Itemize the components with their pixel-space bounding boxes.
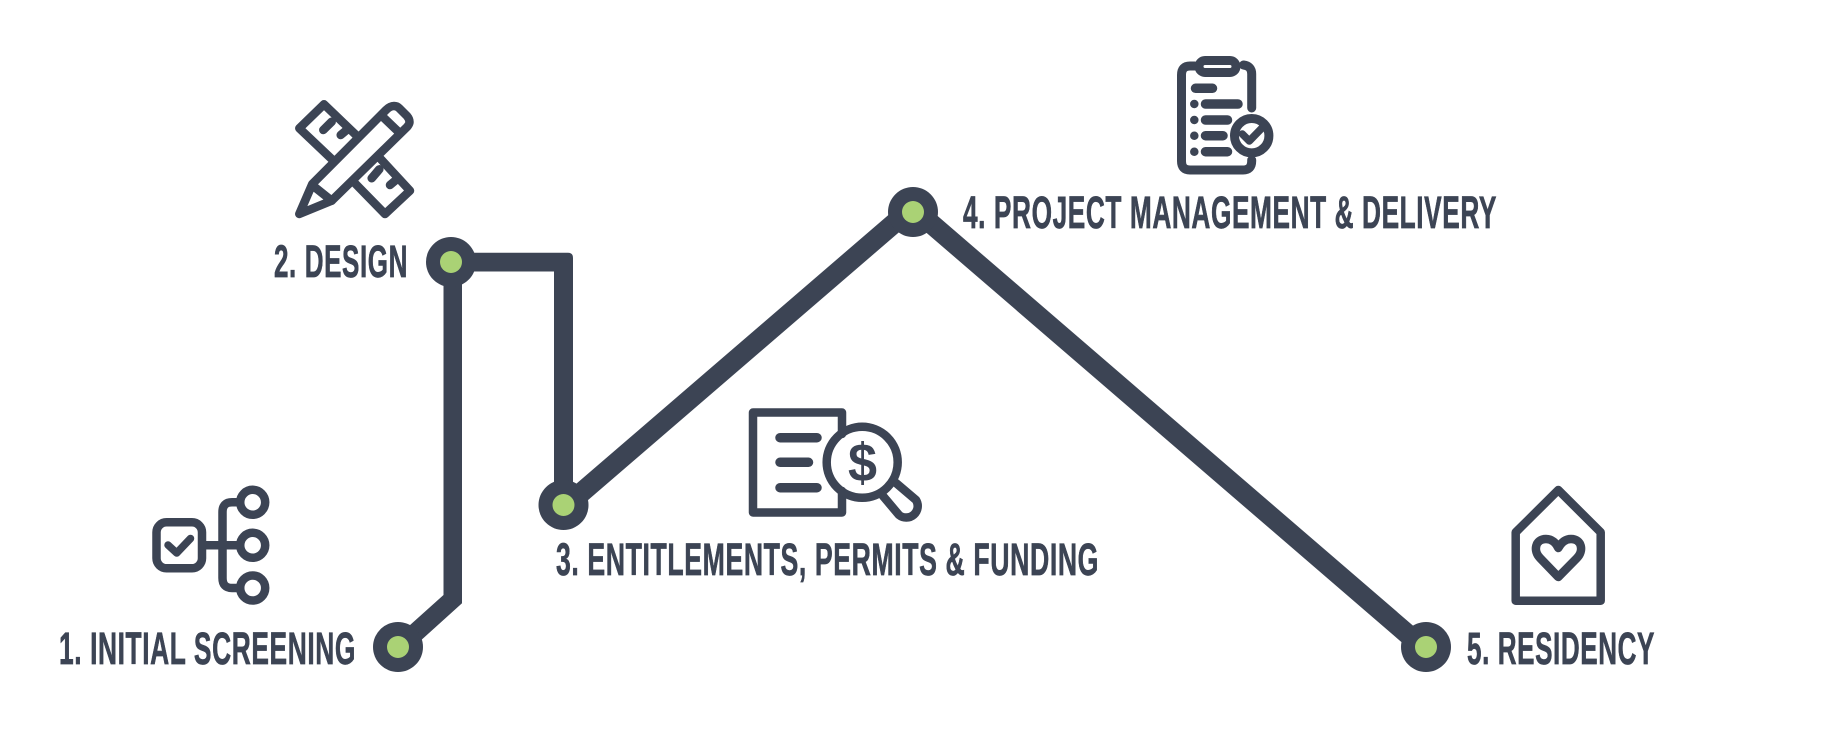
icon: pencil and ruler — [299, 104, 410, 214]
panel: step 2 design — [274, 104, 476, 287]
route line connecting the five stages — [385, 207, 1426, 661]
node: step 1 — [373, 622, 423, 672]
panel: step 1 initial screening — [59, 490, 423, 674]
icon: document with magnifier and dollar sign: $ — [848, 433, 877, 493]
node: step 2 — [426, 237, 476, 287]
panel: step 5 residency — [1401, 490, 1655, 674]
panel: step 4 project management and delivery — [888, 60, 1497, 238]
icon: screening flow chart — [156, 490, 265, 600]
label: step 2: 2. DESIGN — [274, 236, 408, 287]
node: step 3 — [538, 480, 588, 530]
icon: clipboard checklist — [1182, 60, 1269, 170]
label: step 5: 5. RESIDENCY — [1467, 623, 1655, 674]
label: step 1: 1. INITIAL SCREENING — [59, 623, 356, 674]
label: step 3: 3. ENTITLEMENTS, PERMITS & FUNDING — [556, 534, 1099, 585]
icon: house with heart — [1516, 490, 1601, 601]
panel: step 3 entitlements, permits and funding — [538, 412, 1099, 585]
icon: document with magnifier and dollar sign — [753, 412, 918, 518]
node: step 4 — [888, 187, 938, 237]
node: step 5 — [1401, 622, 1451, 672]
